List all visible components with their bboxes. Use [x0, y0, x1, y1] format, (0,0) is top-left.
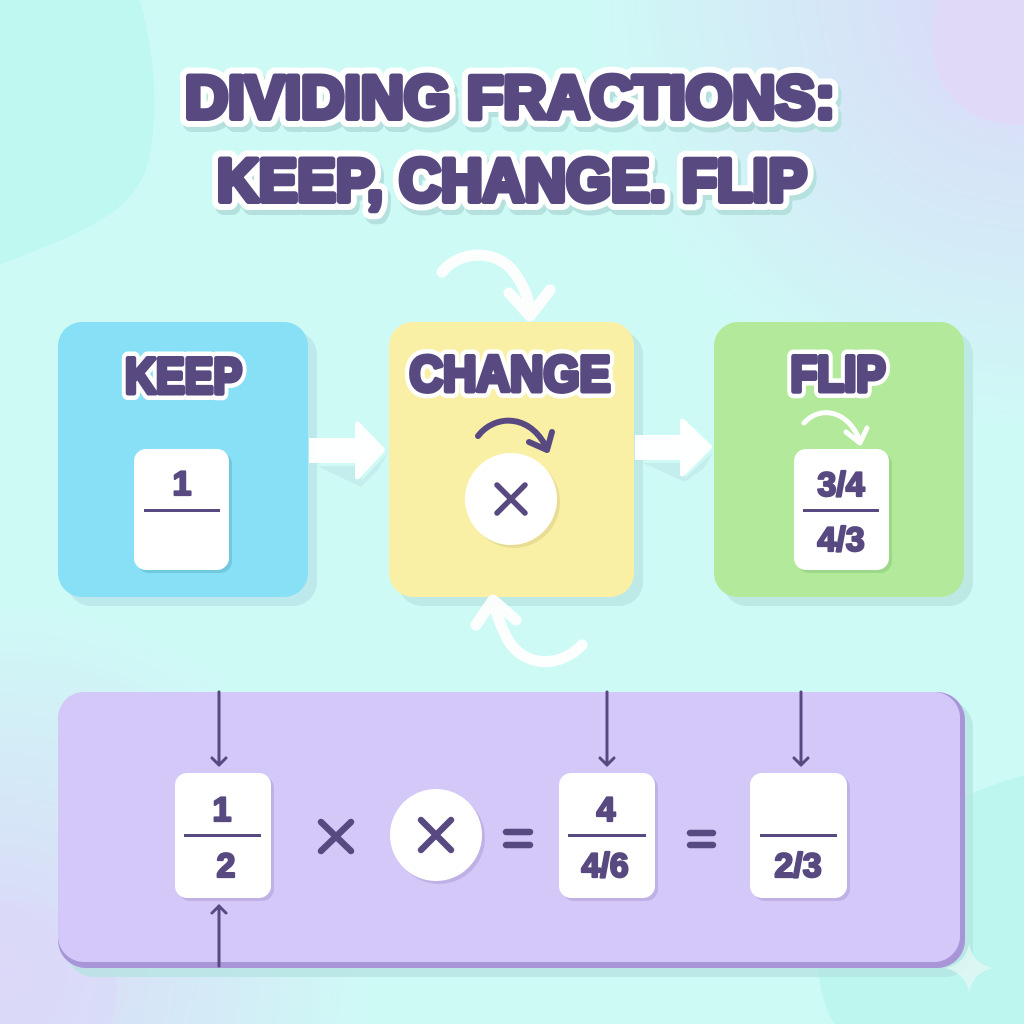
heading: flip: FLIP [790, 346, 886, 402]
equals sign [506, 832, 530, 845]
fraction card: 1 over blank [134, 449, 232, 573]
fraction card: blank over 2/3 [750, 773, 850, 901]
arrow: down to second fraction [600, 692, 614, 765]
heading: change: CHANGE [410, 346, 610, 402]
panel: keep [58, 322, 317, 606]
panel: change [389, 322, 643, 606]
icon: white curved arrow [804, 413, 867, 443]
fraction card: 1/2: 2 [217, 847, 235, 885]
panel: worked example [58, 692, 973, 977]
title: DIVIDING FRACTIONS: [185, 64, 835, 131]
arrow: curved arrow into Change from below [476, 600, 582, 662]
arrow: down to third fraction [794, 692, 808, 765]
heading: change: CHANGE [410, 346, 610, 402]
title [185, 64, 838, 219]
fraction card: blank over 2/3: 2/3 [774, 847, 822, 885]
icon: sparkle [945, 944, 993, 992]
fraction card: 1/2 [175, 773, 274, 901]
panel: flip [714, 322, 973, 606]
title: KEEP, CHANGE. FLIP [217, 147, 807, 214]
fraction card: 3/4 over 4/3 [794, 449, 892, 573]
equals sign [690, 833, 713, 845]
arrow: down to first fraction [212, 692, 226, 765]
title: KEEP, CHANGE. FLIP [220, 152, 810, 219]
fraction card: 4 over 4/6: 4/6 [581, 847, 629, 885]
fraction card: 3/4 over 4/3: 3/4 [817, 466, 865, 504]
arrow: Change to Flip [635, 419, 714, 482]
arrow: up to first fraction [212, 906, 226, 966]
title: DIVIDING FRACTIONS: [188, 69, 838, 136]
icon: multiply sign [321, 822, 351, 851]
fraction card: 1 over blank: 1 [173, 465, 191, 503]
fraction card: 1/2: 1 [213, 791, 231, 829]
icon: multiply circle [465, 453, 560, 548]
heading: keep: KEEP [125, 348, 242, 404]
fraction card: 4 over 4/6 [559, 773, 658, 901]
title: KEEP, CHANGE. FLIP [217, 147, 807, 214]
icon: curved arrow [478, 421, 552, 450]
heading: keep: KEEP [125, 348, 242, 404]
icon: multiply circle [390, 789, 485, 884]
title: DIVIDING FRACTIONS: [185, 64, 835, 131]
arrow: curved arrow into Change from above [442, 255, 550, 316]
fraction card: 4 over 4/6: 4 [597, 791, 616, 829]
heading: flip: FLIP [790, 346, 886, 402]
fraction card: 3/4 over 4/3: 4/3 [817, 521, 865, 559]
arrow: Keep to Change [309, 422, 388, 487]
